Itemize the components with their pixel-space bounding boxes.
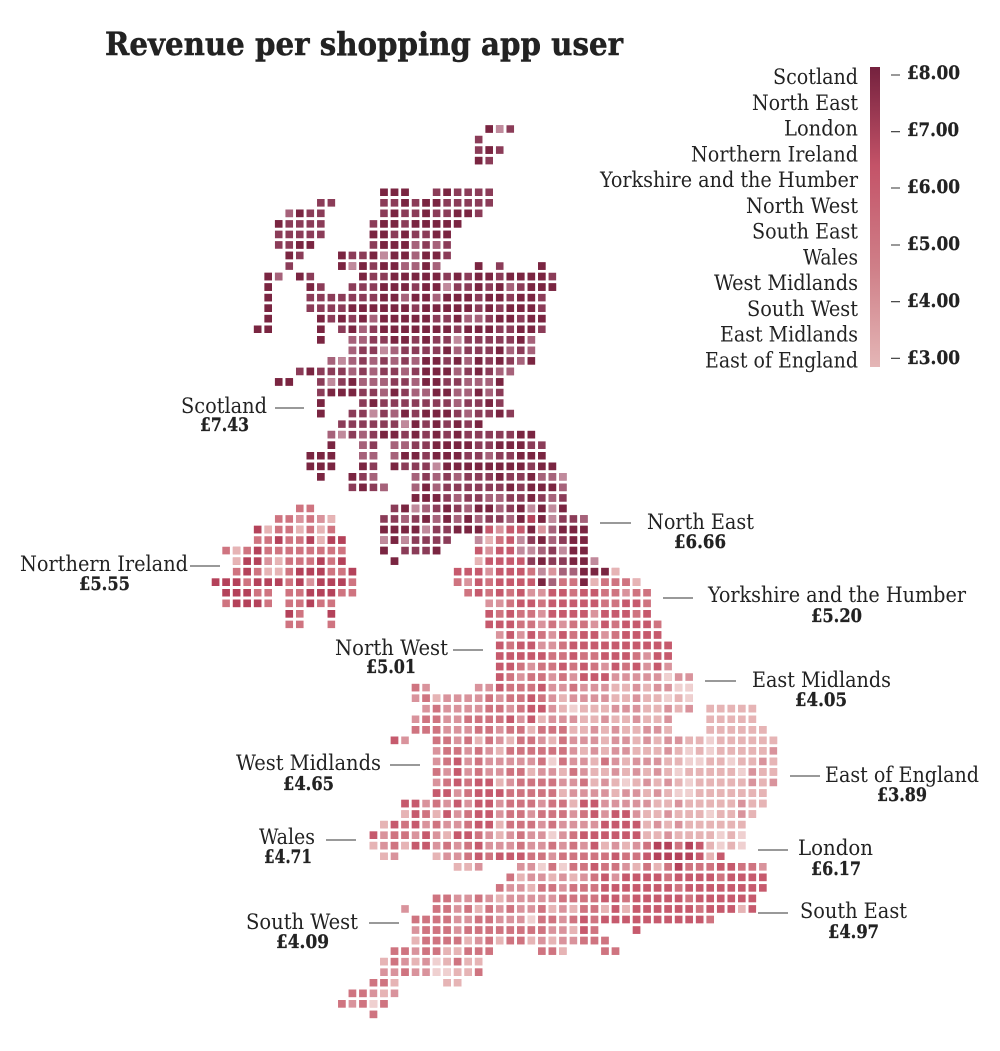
callout: London: London bbox=[798, 836, 873, 860]
callout: London: £6.17 bbox=[811, 859, 861, 880]
callout: Wales: £4.71 bbox=[264, 847, 312, 868]
legend: ranked region list: Wales bbox=[803, 245, 858, 269]
callout: Scotland: £7.43 bbox=[200, 415, 249, 436]
pale pink cells bbox=[233, 519, 780, 993]
red cells bbox=[370, 530, 770, 930]
callout: Wales: Wales bbox=[259, 825, 315, 849]
callout: South West: South West bbox=[246, 910, 358, 934]
legend: ranked region list: Scotland bbox=[773, 65, 858, 89]
callout: London bbox=[758, 836, 873, 880]
callout: South West: £4.09 bbox=[276, 932, 329, 953]
legend: ranked region list: Northern Ireland bbox=[691, 142, 858, 166]
callout: North East bbox=[600, 510, 754, 553]
soft pink cells bbox=[264, 519, 559, 582]
callout: Scotland: Scotland bbox=[181, 394, 267, 418]
callout: Wales bbox=[259, 825, 356, 868]
legend: ranked region list: East Midlands bbox=[720, 322, 858, 346]
map: UK pixel grid bbox=[212, 129, 780, 1014]
legend: ranked region list: Yorkshire and the Humber bbox=[599, 168, 859, 192]
callout: South West bbox=[246, 910, 399, 953]
legend: ranked region list: East of England bbox=[705, 348, 858, 372]
pale wine cells bbox=[328, 129, 601, 572]
base cells: Scotland and far north bbox=[254, 129, 591, 561]
callout: West Midlands: £4.65 bbox=[283, 774, 334, 795]
legend: ranked region list: West Midlands bbox=[714, 271, 858, 295]
callout: Northern Ireland bbox=[20, 552, 220, 595]
callout: Yorkshire and the Humber bbox=[663, 583, 967, 627]
callout: North East: North East bbox=[647, 510, 754, 534]
legend: scale ticks and values: £6.00 bbox=[907, 177, 960, 198]
darkest cells bbox=[254, 129, 612, 582]
legend: ranked region list: North East bbox=[752, 91, 858, 115]
base cells: northern England top bbox=[454, 540, 643, 582]
legend: scale ticks and values: £4.00 bbox=[907, 291, 960, 312]
palest cells bbox=[370, 677, 749, 1004]
callout: West Midlands bbox=[236, 751, 420, 795]
dark wine cells in northern England bbox=[528, 540, 570, 561]
rose cells bbox=[338, 540, 759, 1014]
legend: ranked region list: South West bbox=[747, 297, 858, 321]
base cells: England and Wales bbox=[338, 593, 780, 1014]
base cells: Northern Ireland bbox=[212, 508, 359, 624]
callout: South East bbox=[758, 899, 907, 943]
legend: ranked region list bbox=[599, 65, 859, 372]
callout: North West: £5.01 bbox=[366, 657, 416, 678]
legend: scale ticks and values: £3.00 bbox=[907, 348, 960, 369]
legend: scale ticks and values bbox=[891, 63, 960, 369]
callout: West Midlands: West Midlands bbox=[236, 751, 381, 775]
strong red cells: Northern Ireland and London bbox=[212, 519, 696, 867]
callout: East Midlands bbox=[705, 668, 891, 711]
callout: North East: £6.66 bbox=[674, 532, 726, 553]
legend: ranked region list: North West bbox=[746, 194, 858, 218]
legend: scale ticks and values: £7.00 bbox=[907, 120, 959, 141]
mid wine cells bbox=[275, 213, 591, 582]
callout: East of England: £3.89 bbox=[877, 785, 927, 806]
legend: scale ticks and values: £8.00 bbox=[907, 63, 960, 84]
callout: Yorkshire and the Humber: £5.20 bbox=[811, 606, 862, 627]
callout: East Midlands: East Midlands bbox=[752, 668, 891, 692]
callout: Yorkshire and the Humber: Yorkshire and the Humber bbox=[707, 583, 967, 607]
callout: South East: South East bbox=[800, 899, 907, 923]
legend: scale ticks and values: £5.00 bbox=[907, 234, 960, 255]
legend: ranked region list: London bbox=[784, 116, 858, 140]
callout: Northern Ireland: Northern Ireland bbox=[20, 552, 188, 576]
callout: South East: £4.97 bbox=[828, 922, 879, 943]
callout: East of England bbox=[790, 763, 979, 806]
callout: East of England: East of England bbox=[825, 763, 979, 787]
title: Revenue per shopping app user bbox=[105, 25, 624, 63]
callout: Scotland bbox=[181, 394, 304, 436]
callout: East Midlands: £4.05 bbox=[795, 690, 847, 711]
callout: North West bbox=[335, 636, 483, 678]
callout: North West: North West bbox=[335, 636, 448, 660]
callout: Northern Ireland: £5.55 bbox=[79, 574, 130, 595]
legend: ranked region list: South East bbox=[752, 220, 858, 244]
legend: colour scale bar bbox=[870, 67, 880, 367]
